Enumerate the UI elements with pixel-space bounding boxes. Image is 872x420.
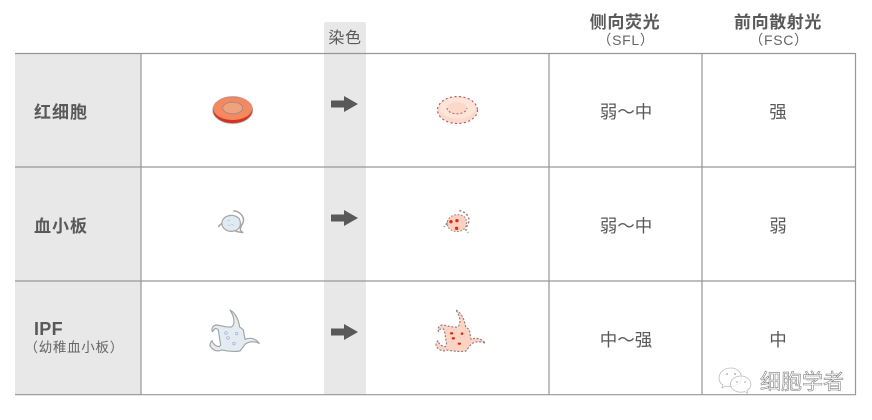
arrow: red blood cell row — [331, 96, 358, 112]
arrow: platelet row — [331, 210, 358, 226]
panel: row label column — [15, 53, 141, 395]
row label: IPF: （幼稚血小板） — [24, 340, 124, 355]
heading: side fluorescence: （SFL） — [597, 32, 655, 48]
heading: stain: 染色 — [328, 29, 362, 47]
value: IPF SFL: 中～强 — [600, 330, 652, 350]
icon: WeChat watermark — [719, 368, 751, 393]
icon: stained IPF — [436, 310, 485, 351]
icon: stained red blood cell — [438, 96, 478, 124]
value: platelet SFL: 弱～中 — [600, 216, 652, 236]
heading: forward scatter: （FSC） — [749, 32, 809, 48]
value: platelet FSC: 弱 — [769, 216, 787, 236]
heading: forward scatter: 前向散射光 — [734, 13, 822, 32]
table grid — [15, 53, 856, 395]
icon: platelet — [218, 211, 244, 233]
heading: forward scatter — [734, 13, 822, 48]
heading: side fluorescence — [590, 13, 660, 48]
value: RBC SFL: 弱～中 — [600, 102, 652, 122]
value: RBC FSC: 强 — [769, 102, 787, 122]
row label: platelet: 血小板 — [34, 217, 88, 236]
row label: red blood cell: 红细胞 — [34, 102, 88, 122]
icon: red blood cell — [213, 96, 253, 124]
value: IPF FSC: 中 — [769, 330, 787, 350]
icon: stained platelet — [444, 211, 469, 233]
heading: side fluorescence: 侧向荧光 — [590, 13, 660, 32]
panel: stain column — [324, 22, 366, 395]
row label: IPF — [24, 319, 124, 355]
row label: IPF: IPF — [34, 319, 63, 339]
icon: IPF — [210, 310, 259, 351]
arrow: IPF row — [331, 324, 358, 340]
watermark text: 细胞学者 — [760, 371, 844, 394]
